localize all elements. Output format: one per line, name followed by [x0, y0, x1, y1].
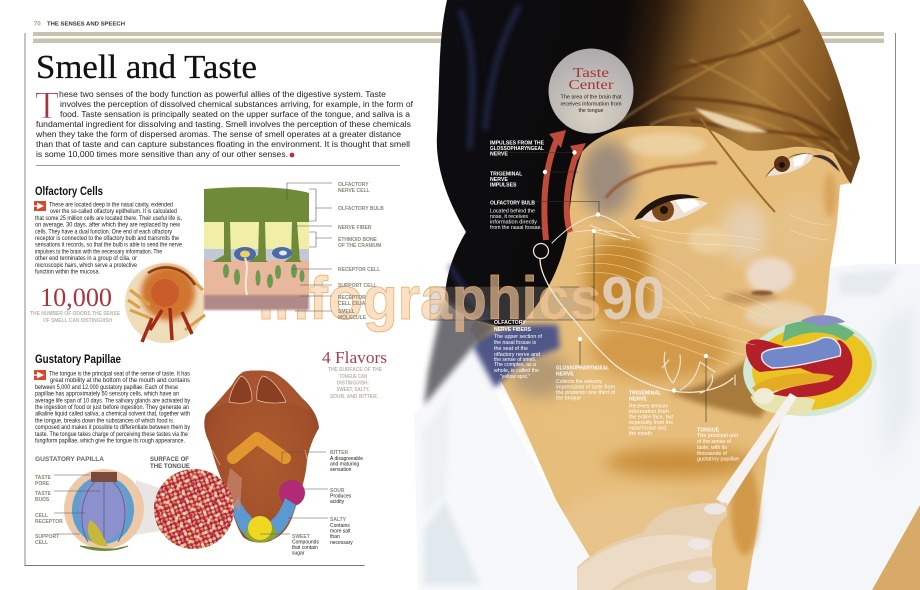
labels: flavors: BITTER	[330, 450, 348, 456]
labels: olfactory diagram: OLFACTORY BULB	[338, 206, 384, 212]
panel: olfactory cells text: function within the mucosa.	[35, 270, 100, 276]
panel: gustatory papillae text: average life span of 10 days. The salivary glands are activated by	[35, 398, 190, 404]
labels: papilla: BUDS	[35, 497, 50, 503]
labels: flavors	[260, 450, 363, 556]
label: olfactory nerve fibers: "yellow spot."	[500, 374, 530, 380]
callout: 4 flavors	[322, 348, 387, 400]
callout: 10,000 odors	[30, 283, 121, 324]
left eye	[637, 198, 708, 222]
label: tongue	[697, 428, 739, 462]
header: page number and section: 70	[34, 22, 41, 28]
label: trigeminal nerve: NERVE	[629, 396, 647, 402]
skin base	[470, 110, 850, 590]
labels: flavors: SALTY	[330, 517, 347, 523]
label: olfactory nerve fibers: the sense of smell.	[494, 357, 536, 363]
labels: olfactory diagram: NERVE FIBER	[338, 225, 372, 231]
panel: olfactory cells text: These are located deep in the nasal cavity, extended	[49, 202, 173, 208]
label: olfactory bulb: OLFACTORY BULB	[490, 200, 535, 206]
diagram: tongue	[204, 370, 319, 543]
label: glossopharyngeal nerve: Collects the sensory	[556, 379, 602, 385]
label: trigeminal nerve: Receives sensory	[629, 404, 668, 410]
labels: papilla: PORE	[35, 481, 50, 487]
heading: surface of the tongue	[150, 456, 190, 470]
panel: gustatory papillae text: papillae has approximately 50 sensory cells, which have an	[35, 392, 179, 398]
hand	[577, 503, 727, 590]
title: Smell and Taste	[36, 49, 257, 86]
lower hair strands	[424, 300, 498, 405]
panel: olfactory cells text: impulses to the brain with the necessary information. The	[35, 249, 163, 255]
labels: papilla: SUPPORT	[35, 534, 59, 540]
label: glossopharyngeal nerve: GLOSSOPHARYNGEAL	[556, 366, 610, 372]
panel: olfactory cells text	[34, 184, 183, 276]
facial contour lines	[575, 215, 832, 365]
callout: 4 flavors: THE SURFACE OF THE	[328, 367, 382, 373]
hair highlights	[620, 15, 852, 170]
label: tongue: of the sense of	[697, 439, 732, 445]
labels: flavors: SOUR	[330, 488, 345, 494]
panel: gustatory papillae text: the ingestion of food or just before ingestion. They generate an	[35, 405, 189, 411]
labels: olfactory diagram: RECEPTOR CELL	[338, 267, 380, 273]
label: olfactory bulb: information directly	[490, 220, 537, 226]
callout: 10,000 odors: 10,000	[40, 283, 112, 312]
label: olfactory nerve fibers: OLFACTORY	[494, 320, 526, 326]
label: tongue: thousands of	[697, 451, 728, 457]
right eye	[767, 154, 813, 176]
labels: olfactory diagram: OF THE CRANIUM	[338, 243, 381, 249]
label: trigeminal impulses	[490, 172, 523, 188]
labels: olfactory diagram: SUPPORT CELL	[338, 283, 377, 289]
labels: olfactory diagram: NERVE CELL	[338, 188, 370, 194]
microscope image: olfactory cell	[125, 263, 205, 343]
label: trigeminal impulses: TRIGEMINAL	[490, 172, 523, 178]
labels: olfactory diagram: SMELL	[338, 309, 355, 315]
labels: flavors: sugar	[292, 550, 305, 556]
callout: taste center: Center	[568, 78, 614, 93]
shirt right side	[747, 264, 920, 590]
label: olfactory nerve fibers	[494, 320, 543, 380]
label: glossopharyngeal nerve: the tongue	[556, 396, 581, 402]
intro paragraph: involves the perception of dissolved chemical substances arriving, for example, in the form of	[60, 99, 414, 109]
panel: olfactory cells text: sensations it records, so that the bulb is able to send the nerve	[35, 243, 183, 249]
labels: papilla: CELL	[35, 513, 48, 519]
labels: flavors: acidity	[330, 499, 345, 505]
label: olfactory bulb: Located behind the	[490, 208, 535, 214]
label: olfactory bulb: nose, it receives	[490, 214, 528, 220]
nerve stalks	[224, 222, 300, 262]
receptor blobs	[234, 247, 256, 261]
heading: surface of the tongue: SURFACE OF	[150, 456, 189, 463]
intro paragraph: when they take the form of dispersed aromas. The sense of smell operates at a greater distance	[35, 129, 401, 139]
lollipop stick	[716, 393, 797, 506]
panel: gustatory papillae text: The tongue is the principal seat of the sense of taste. It has	[49, 372, 190, 378]
intro paragraph: is some 10,000 times more sensitive than any of our other senses.	[36, 149, 288, 159]
label: olfactory nerve fibers: the seat of the	[494, 346, 528, 352]
labels: papilla	[35, 475, 100, 546]
label: tongue: TONGUE	[697, 428, 720, 434]
lollipop blue swirl	[762, 337, 841, 368]
intro paragraph: than that of taste and can capture substances floating in the environment. It is thought that smell	[36, 139, 410, 149]
photo: woman with lollipop	[414, 0, 920, 590]
diagram: taste bud papilla	[64, 469, 144, 550]
callout: taste center: Taste	[573, 66, 609, 81]
labels: olfactory diagram: ETHMOID BONE	[338, 237, 378, 243]
label: olfactory nerve fibers: The complex, as a	[494, 362, 536, 368]
label: olfactory nerve fibers: The upper section of	[494, 334, 543, 340]
intro paragraph: fundamental ingredient for dissolving and tasting. Smell involves the perception of these chemicals	[36, 119, 411, 129]
labels: olfactory diagram: MOLECULE	[338, 315, 367, 321]
label: glossopharyngeal impulses: GLOSSOPHARYNGEAL	[490, 146, 545, 152]
callout: 4 flavors: TONGUE CAN	[339, 374, 367, 380]
watermark: Infographics90	[258, 265, 665, 332]
drop cap: T	[35, 84, 59, 127]
connector wedges	[135, 480, 165, 535]
label: olfactory nerve fibers: whole, is called the	[494, 368, 539, 374]
hair	[437, 0, 860, 326]
diagram: olfactory epithelium	[204, 187, 309, 310]
panel: gustatory papillae text: fungiform papillae, which give the tongue its rough appearance.	[35, 438, 185, 444]
labels: flavors: necessary	[330, 540, 353, 546]
label: trigeminal impulses: IMPULSES	[490, 182, 517, 188]
labels: flavors: A disagreeable	[330, 456, 363, 462]
skin lower right	[872, 505, 920, 590]
callout: taste center	[548, 48, 634, 134]
icon: arrow bullet	[34, 370, 46, 380]
label: tongue: taste, with its	[697, 445, 727, 451]
labels: flavors: Contains	[330, 523, 350, 529]
panel: gustatory papillae text: composed and makes it possible to differentiate between them by	[35, 425, 190, 431]
flavor zones	[233, 438, 285, 458]
panel: gustatory papillae text: great mobility at the bottom of the mouth and contains	[50, 378, 190, 384]
labels: flavors: more salt	[330, 528, 351, 534]
label: olfactory nerve fibers: the nasal fossae is	[494, 340, 536, 346]
label: glossopharyngeal nerve	[556, 366, 616, 402]
panel: olfactory cells text: microscopic hairs, which serve a protective	[35, 263, 138, 269]
jaw shadow	[668, 358, 775, 418]
labels: olfactory diagram: OLFACTORY	[338, 182, 369, 188]
label: glossopharyngeal nerve: the posterior one third of	[556, 390, 616, 396]
panel: olfactory cells text: receptor is connected to the olfactory bulb and transmits the	[35, 236, 180, 242]
callout: taste center: The area of the brain that	[560, 94, 622, 100]
labels: olfactory diagram: RECEPTOR	[338, 295, 366, 301]
panel: olfactory cells text: Olfactory Cells	[35, 184, 103, 198]
label: glossopharyngeal nerve: NERVE	[556, 372, 574, 378]
label: trigeminal nerve: TRIGEMINAL	[629, 390, 662, 396]
throat outlines	[229, 376, 286, 403]
label: tongue: The principal unit	[697, 433, 739, 439]
panel: olfactory cells text: other end terminates in a group of cilia, or	[35, 256, 137, 262]
label: olfactory bulb	[490, 200, 542, 231]
callout: 4 flavors: 4 Flavors	[322, 348, 387, 367]
labels: flavors: sensation	[330, 467, 352, 473]
panel: gustatory papillae text: between 5,000 and 12,000 gustatory papillae. Each of these	[35, 385, 179, 391]
panel: gustatory papillae text: alkaline liquid called saliva, a chemical solvent that, together with	[35, 412, 190, 418]
labels: flavors: and maturing	[330, 462, 359, 468]
label: trigeminal nerve: nasal fossae and	[629, 426, 666, 432]
panel: olfactory cells text: on average, 30 days, after which they are replaced by new	[35, 223, 181, 229]
image: tongue surface	[154, 468, 242, 549]
labels: olfactory diagram: CELL CILIA	[338, 301, 366, 307]
icon: arrow bullet	[34, 201, 46, 211]
callout: taste center: the tongue	[578, 108, 604, 114]
labels: flavors: Compounds	[292, 540, 319, 546]
label: trigeminal nerve: the entire face, but	[629, 414, 674, 420]
labels: flavors: SWEET	[292, 534, 310, 540]
intro paragraph	[35, 84, 414, 159]
intro paragraph: hese two senses of the body function as powerful allies of the digestive system. Taste	[59, 89, 386, 99]
shadow under collar	[473, 324, 560, 388]
labels: papilla: CELL	[35, 540, 48, 546]
heading: surface of the tongue: THE TONGUE	[150, 463, 190, 470]
callout: 10,000 odors: THE NUMBER OF ODORS THE SENSE	[30, 311, 121, 317]
label: trigeminal nerve: information from	[629, 409, 669, 415]
label: trigeminal nerve: especially from the	[629, 420, 673, 426]
skin tones	[560, 490, 700, 560]
lollipop red band	[746, 339, 852, 397]
label: olfactory bulb: from the nasal fossae.	[490, 225, 542, 231]
label: glossopharyngeal nerve: impressions of taste from	[556, 384, 615, 390]
header: page number and section: THE SENSES AND SPEECH	[47, 22, 125, 28]
labels: papilla: TASTE	[35, 475, 52, 481]
arrows: nerve impulses to the taste center	[544, 130, 586, 240]
labels: flavors: that contain	[292, 545, 318, 551]
label: glossopharyngeal impulses: IMPULSES FROM THE	[490, 140, 545, 146]
heading: gustatory papilla: GUSTATORY PAPILLA	[35, 456, 105, 463]
panel: olfactory cells text: that some 25 million cells are located there. Their useful life is,	[35, 216, 182, 222]
label: glossopharyngeal impulses	[490, 140, 545, 158]
label: glossopharyngeal impulses: NERVE	[490, 152, 508, 158]
callout: 4 flavors: SOUR, AND BITTER.	[330, 394, 379, 400]
label: tongue: gustatory papillae	[697, 456, 739, 462]
panel: gustatory papillae text: taste. The tongue takes charge of perceiving these tastes via the	[35, 432, 189, 438]
label: trigeminal nerve: the mouth	[629, 431, 652, 437]
lollipop	[738, 310, 882, 423]
panel: olfactory cells text: over the so-called olfactory epithelium. It is calculated	[50, 209, 177, 215]
labels: papilla: TASTE	[35, 491, 52, 497]
label: trigeminal nerve	[629, 390, 674, 437]
label: olfactory nerve fibers: NERVE FIBERS	[494, 327, 532, 333]
callout: 10,000 odors: OF SMELL CAN DISTINGUISH	[43, 318, 112, 324]
nerve pointers	[490, 150, 708, 422]
intro paragraph: food. Taste sensation is principally seated on the upper surface of the tongue, and saliva is a	[60, 109, 410, 119]
panel: gustatory papillae text: Gustatory Papillae	[35, 352, 121, 366]
panel: gustatory papillae text: the tongue, breaks down the substances of which food is	[35, 418, 173, 424]
panel: olfactory cells text: cells. They have a dual function. One end of each olfactory	[35, 229, 172, 235]
callout: taste center: receives information from	[560, 102, 622, 108]
label: trigeminal impulses: NERVE	[490, 177, 508, 183]
labels: olfactory diagram	[287, 182, 384, 321]
green cells	[223, 264, 304, 288]
labels: papilla: RECEPTOR	[35, 519, 63, 525]
callout: 4 flavors: SWEET, SALTY,	[336, 387, 370, 393]
label: olfactory nerve fibers: olfactory nerve and	[494, 352, 540, 358]
lips	[762, 318, 818, 352]
panel: gustatory papillae text	[34, 352, 190, 444]
nerve illustration	[534, 215, 735, 393]
labels: flavors: Produces	[330, 494, 352, 500]
labels: flavors: than	[330, 534, 340, 540]
callout: 4 flavors: DISTINGUISH:	[337, 380, 369, 386]
lollipop yellow band	[752, 373, 834, 398]
eyebrows	[606, 163, 717, 198]
left shirt	[414, 347, 620, 590]
